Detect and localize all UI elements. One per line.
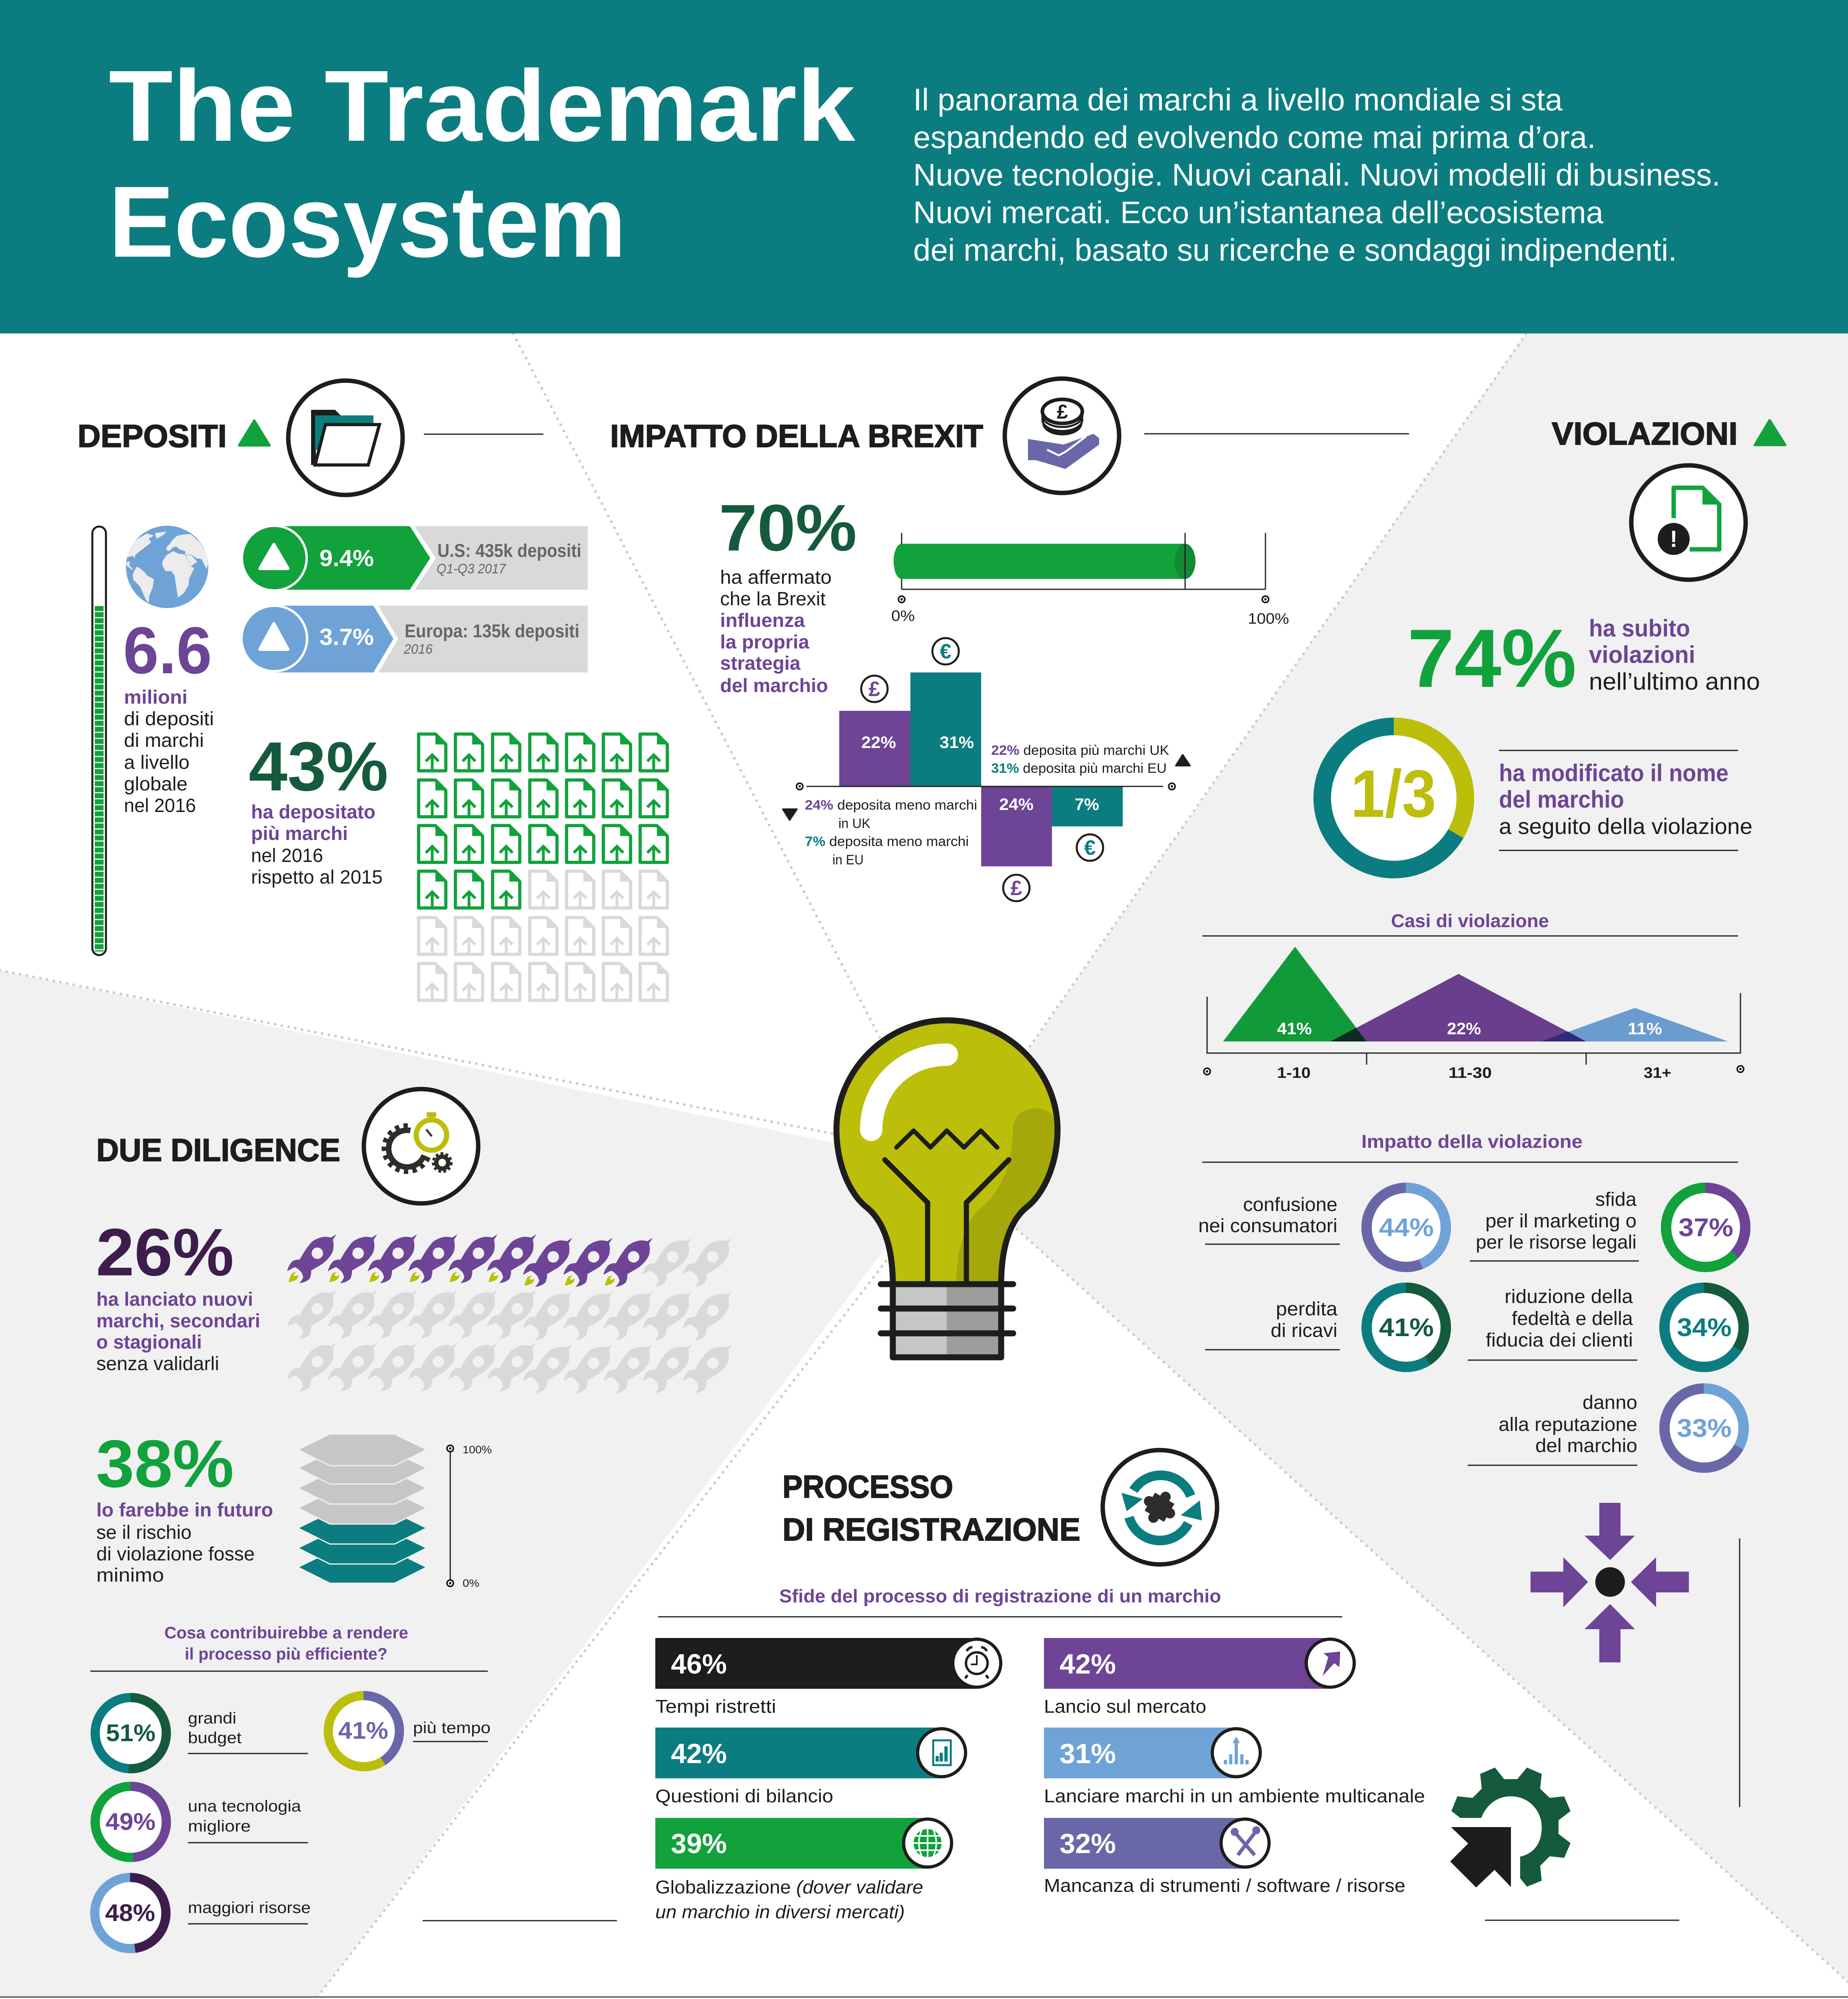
stat: 6.6 milioni: 6.6 [123,614,212,688]
chart: casi di violazione: 22% [1447,1019,1481,1038]
stat: 6.6 milioni [123,614,214,816]
stat: 70% [719,491,857,696]
item: reputazione 33%: alla reputazione [1499,1414,1637,1435]
item: 51% grandi budget: 51% [106,1720,156,1746]
item: sfida 37%: per le risorse legali [1476,1232,1636,1253]
stat: 70%: del marchio [720,675,828,696]
icon: document alert: ! [1670,526,1678,552]
chart: hexagon stack [298,1434,427,1583]
item: fedeltà 34%: 34% [1677,1313,1732,1342]
chart: UK and EU filings: € [1084,836,1096,860]
stat: 43%: ha depositato [251,802,375,823]
item: reputazione 33% [1468,1389,1744,1468]
stat: 6.6 milioni: milioni [124,687,188,708]
banner: Europe filings [241,606,588,672]
item: 41% più tempo: 41% [338,1717,388,1744]
chart: casi di violazione: 1-10 [1277,1065,1311,1081]
item: 49% tecnologia migliore: una tecnologia [188,1798,301,1815]
item: sfida 37%: per il marketing o [1485,1211,1636,1232]
chart: UK and EU filings: 24% [999,795,1034,814]
icon: light bulb [836,1020,1058,1357]
icon: globe [126,526,208,608]
chart: UK and EU filings: 22% deposita più marchi UK [991,743,1169,758]
stat: 6.6 milioni: a livello [124,752,190,773]
chart: casi di violazione [1202,910,1744,1081]
stat: 6.6 milioni: di depositi [124,708,214,730]
heading: processo di registrazione [782,1469,1080,1547]
stat: 26%: ha lanciato nuovi [96,1289,253,1310]
bar: 32% strumenti: 32% [1060,1828,1116,1859]
item: perdita 41%: di ricavi [1271,1320,1337,1341]
item: 49% tecnologia migliore [95,1786,308,1857]
banner: US filings: U.S: 435k depositi [437,540,581,561]
stat: 43%: rispetto al 2015 [251,867,383,888]
item: sfida 37% [1470,1188,1745,1267]
chart: casi di violazione: 11-30 [1449,1065,1492,1081]
panel: header [0,0,1848,333]
stat: 43%: più marchi [251,823,348,844]
stat: 70%: la propria [720,632,809,653]
chart: UK and EU filings: £ [869,678,880,701]
chart axis: 0 to 100%: 100% [463,1444,492,1456]
item: reputazione 33%: 33% [1677,1414,1732,1442]
item: fedeltà 34%: fedeltà e della [1512,1308,1633,1329]
chart: UK and EU filings: in EU [832,852,864,868]
item: 49% tecnologia migliore: migliore [188,1817,251,1835]
text: ha modificato il nome [1499,750,1752,850]
chart: 70% cylinder bar: 0% [891,608,915,624]
stat: 38%: 38% [96,1426,234,1501]
item: fedeltà 34% [1468,1286,1744,1367]
chart axis: 0 to 100% [447,1444,492,1589]
chart axis: 0 to 100%: 0% [463,1577,479,1589]
banner: Europe filings: 3.7% [319,624,374,650]
item: reputazione 33%: danno [1583,1392,1637,1413]
bar: 39% globalizzazione: Globalizzazione (dover validare [655,1877,923,1897]
item: 48% maggiori risorse: 48% [105,1899,155,1926]
donut: 1/3: 1/3 [1351,756,1436,831]
stat: 74%: violazioni [1589,641,1695,668]
stat: 74%: 74% [1407,612,1577,704]
chart: UK and EU filings: 31% [940,733,974,752]
stat: 38%: se il rischio [96,1522,192,1543]
stat: 38%: minimo [96,1565,164,1586]
stat: 38%: lo farebbe in futuro [96,1500,273,1521]
heading: due diligence: DUE DILIGENCE [96,1132,340,1168]
section: cosa contribuirebbe: il processo più efficiente? [185,1644,387,1663]
footer link band [0,1996,1848,1999]
donut: 1/3 [1322,726,1465,870]
stat: 43% [249,727,388,888]
chart: casi di violazione: Casi di violazione [1391,910,1549,931]
item: 41% più tempo: più tempo [413,1719,491,1737]
chart: UK and EU filings [783,638,1190,901]
intro text: dei marchi, basato su ricerche e sondaggi indipendenti. [913,232,1677,267]
chart: casi di violazione: 41% [1277,1019,1312,1038]
bar: 39% globalizzazione [655,1818,952,1922]
panel: due diligence [90,1089,732,1949]
intro text [913,82,1720,267]
section: impatto della violazione [1198,1131,1745,1468]
stat: 74%: nell’ultimo anno [1589,668,1760,695]
heading: processo di registrazione: DI REGISTRAZIONE [782,1512,1080,1547]
item: 41% più tempo [328,1696,491,1767]
banner: US filings: Q1-Q3 2017 [437,561,506,577]
stat: 26%: senza validarli [96,1353,219,1375]
bar: 42% questioni di bilancio [655,1728,966,1806]
pictogram: rockets [287,1234,732,1393]
stat: 26% [96,1215,260,1375]
bar: 32% strumenti: Mancanza di strumenti / software / risorse [1044,1875,1405,1896]
banner: Europe filings: 2016 [403,642,433,657]
bar: 42% lancio sul mercato: 42% [1060,1648,1116,1680]
intro text: Nuovi mercati. Ecco un’istantanea dell’ecosistema [913,195,1604,230]
stat: 74% [1407,612,1760,704]
item: confusione 44%: 44% [1379,1213,1434,1242]
panel: depositi [78,381,667,1000]
chart: UK and EU filings: 22% [861,733,896,752]
heading: violazioni: VIOLAZIONI [1552,416,1738,451]
subtitle: sfide: Sfide del processo di registrazione di un marchio [779,1586,1221,1606]
bar: 42% questioni di bilancio: Questioni di bilancio [655,1786,833,1806]
stat: 26%: o stagionali [96,1332,202,1353]
heading: processo di registrazione: PROCESSO [782,1469,953,1504]
thermometer gauge [92,527,106,955]
bar: 42% lancio sul mercato: Lancio sul mercato [1044,1696,1206,1717]
item: 51% grandi budget [95,1698,308,1769]
stat: 6.6 milioni: globale [124,774,188,795]
item: reputazione 33%: del marchio [1535,1435,1637,1456]
text: ha modificato il nome: ha modificato il nome [1499,760,1728,786]
chart: UK and EU filings: € [940,640,951,663]
item: confusione 44%: nei consumatori [1198,1215,1337,1237]
icon: puzzle in cycle arrows [1103,1450,1217,1564]
stat: 26%: 26% [96,1215,234,1290]
chart: UK and EU filings: 7% deposita meno marchi [805,834,969,849]
panel: violazioni [1198,416,1785,1807]
item: perdita 41%: 41% [1379,1313,1434,1342]
item: 49% tecnologia migliore: 49% [106,1808,156,1835]
stat: 38% [96,1426,273,1586]
bar: 39% globalizzazione: un marchio in diversi mercati) [655,1901,905,1922]
chart: UK and EU filings: in UK [838,816,870,831]
bar: 31% multicanale [1044,1728,1425,1806]
item: confusione 44% [1198,1188,1446,1267]
chart: 70% cylinder bar: 100% [1248,610,1289,627]
item: 48% maggiori risorse [95,1877,311,1949]
chart: UK and EU filings: 24% deposita meno marchi [805,798,977,813]
bar: 31% multicanale: Lanciare marchi in un ambiente multicanale [1044,1786,1425,1806]
bar: 42% questioni di bilancio: 42% [671,1738,727,1769]
icon: converging arrows [1531,1503,1689,1662]
stat: 6.6 milioni: di marchi [124,730,204,751]
stat: 74%: ha subito [1589,615,1690,642]
bar: 42% lancio sul mercato [1044,1638,1354,1717]
icon: gear and arrow [1450,1768,1571,1887]
heading: brexit: IMPATTO DELLA BREXIT [610,418,983,454]
intro text: Nuove tecnologie. Nuovi canali. Nuovi modelli di business. [913,157,1720,192]
chart: UK and EU filings: £ [1011,877,1022,900]
banner: US filings [242,526,588,591]
chart: UK and EU filings: 7% [1075,795,1099,814]
pictogram: document grid [419,734,667,1000]
chart: 70% cylinder bar [891,533,1289,627]
stat: 70%: influenza [720,610,805,631]
section: cosa contribuirebbe: Cosa contribuirebbe a rendere [164,1623,408,1642]
bar: 39% globalizzazione: 39% [671,1828,727,1859]
bar: 31% multicanale: 31% [1060,1738,1116,1769]
section: cosa contribuirebbe [90,1623,491,1949]
bar: 46% tempi ristretti [655,1638,1001,1717]
stat: 43%: nel 2016 [251,845,323,866]
item: sfida 37%: 37% [1678,1213,1733,1242]
bar: 46% tempi ristretti: 46% [671,1648,727,1680]
stat: 43%: 43% [249,727,388,805]
item: fedeltà 34%: riduzione della [1505,1286,1633,1307]
icon: coins in hand: £ [1057,401,1068,423]
panel: processo di registrazione [655,1450,1679,1922]
icon: up triangle [239,421,269,445]
title: Ecosystem [109,165,626,278]
panel: brexit [610,379,1409,901]
stat: 70%: ha affermato [720,567,832,588]
chart: casi di violazione: 31+ [1644,1065,1671,1081]
item: confusione 44%: confusione [1243,1194,1337,1215]
item: fedeltà 34%: fiducia dei clienti [1486,1330,1633,1351]
icon: coins in hand [1005,379,1119,493]
stat: 26%: marchi, secondari [96,1311,260,1332]
text: ha modificato il nome: del marchio [1499,786,1624,813]
title: The Trademark [109,49,855,162]
icon: up triangle [1755,420,1785,445]
item: 48% maggiori risorse: maggiori risorse [188,1899,311,1917]
intro text: espandendo ed evolvendo come mai prima d’ora. [913,120,1596,155]
section: impatto della violazione: Impatto della violazione [1361,1131,1583,1152]
stat: 38%: di violazione fosse [96,1544,255,1565]
item: 51% grandi budget: budget [188,1729,241,1747]
icon: folder [288,381,403,495]
stat: 70%: 70% [719,491,857,565]
item: perdita 41% [1205,1288,1446,1367]
bar: 46% tempi ristretti: Tempi ristretti [655,1696,776,1717]
text: ha modificato il nome: a seguito della violazione [1499,814,1752,839]
banner: US filings: 9.4% [319,545,374,571]
stat: 70%: strategia [720,653,800,674]
item: sfida 37%: sfida [1595,1189,1636,1210]
heading: depositi: DEPOSITI [78,418,227,454]
title [109,49,855,278]
bar: 32% strumenti [1044,1818,1405,1896]
intro text: Il panorama dei marchi a livello mondiale si sta [913,82,1563,117]
icon: document alert [1631,465,1746,580]
stat: 70%: che la Brexit [720,589,826,610]
banner: Europe filings: Europa: 135k depositi [405,620,579,641]
chart: casi di violazione: 11% [1628,1019,1662,1038]
item: perdita 41%: perdita [1276,1299,1337,1320]
icon: gears and stopwatch [364,1089,478,1203]
chart: UK and EU filings: 31% deposita più marchi EU [991,761,1167,776]
stat: 6.6 milioni: nel 2016 [124,795,196,816]
item: 51% grandi budget: grandi [188,1710,236,1727]
